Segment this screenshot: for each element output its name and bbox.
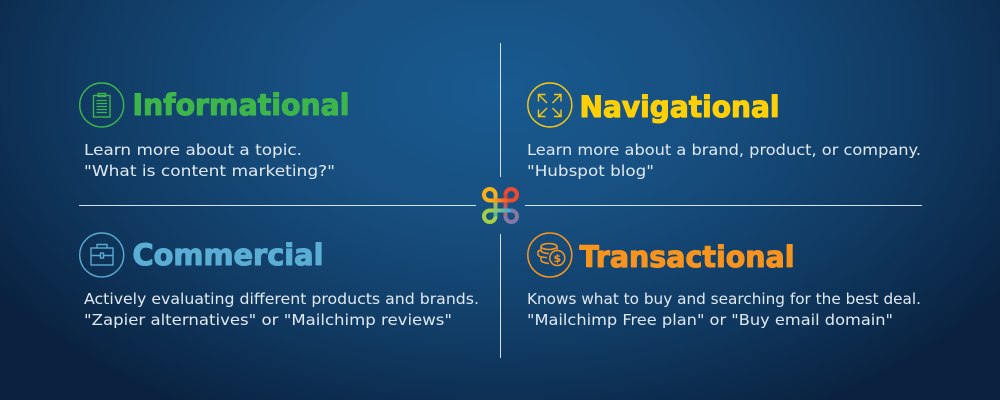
text: informational description: Learn more about a topic.: [84, 141, 302, 159]
text: informational description: "What is content marketing?": [84, 162, 335, 180]
text: transactional description: [527, 290, 921, 329]
text: commercial description: Actively evaluating different products and brands.: [84, 290, 479, 308]
icon: clipboard: [80, 83, 124, 127]
text: navigational description: [527, 141, 921, 180]
icon: central command symbol logo: [484, 189, 517, 222]
panel: informational: [80, 83, 349, 180]
vertical divider bottom: [500, 234, 502, 358]
text: informational description: [84, 141, 335, 180]
panel: transactional: [527, 233, 921, 329]
text: navigational description: Learn more about a brand, product, or company.: [527, 141, 921, 159]
heading: commercial: Commercial: [132, 238, 324, 272]
horizontal divider left: [79, 204, 476, 206]
text: transactional description: "Mailchimp Free plan" or "Buy email domain": [527, 311, 893, 329]
icon: coins: [528, 233, 572, 277]
text: navigational description: "Hubspot blog": [527, 162, 654, 180]
panel: navigational: [527, 83, 921, 180]
heading: informational: Informational: [132, 88, 350, 122]
horizontal divider right: [525, 204, 922, 206]
panel: commercial: [80, 233, 479, 329]
icon: briefcase: [80, 233, 124, 277]
icon: dollar sign: $: [553, 252, 561, 265]
vertical divider top: [500, 43, 502, 177]
text: transactional description: Knows what to buy and searching for the best deal.: [527, 290, 921, 308]
heading: navigational: Navigational: [580, 90, 780, 124]
icon: expand arrows: [528, 83, 572, 127]
text: commercial description: "Zapier alternatives" or "Mailchimp reviews": [84, 311, 452, 329]
text: commercial description: [84, 290, 479, 329]
heading: transactional: Transactional: [580, 240, 794, 274]
